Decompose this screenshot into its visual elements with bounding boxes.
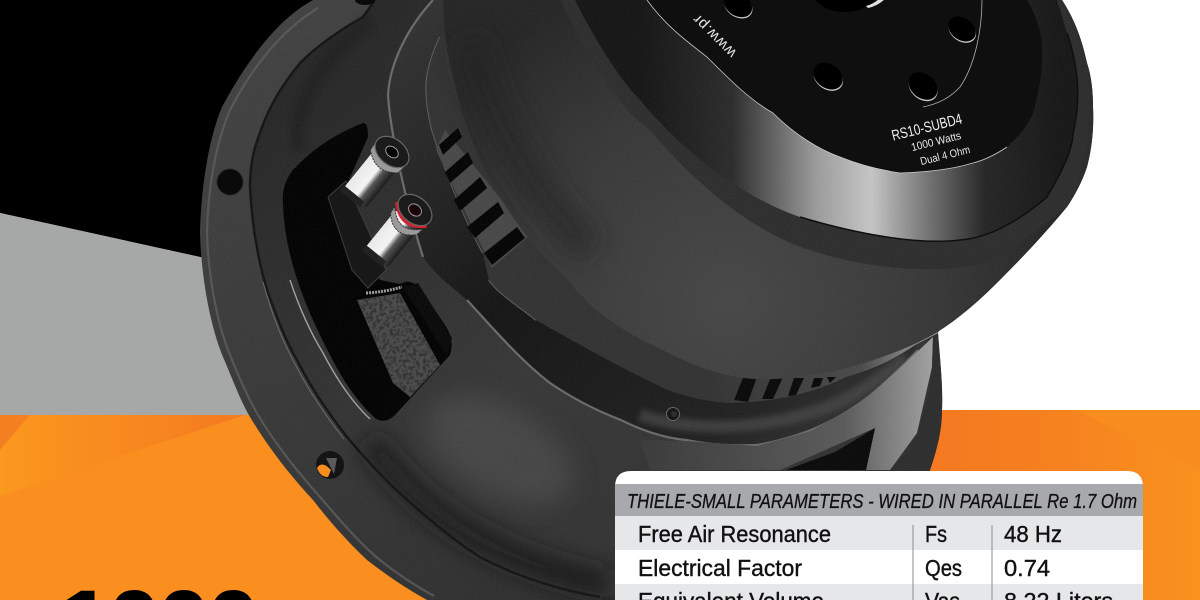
subwoofer flange [200,0,1060,600]
plate url text: www.pr [689,10,741,62]
row 2: electrical factor: Qes [925,555,962,581]
foam gasket [357,293,440,397]
basket upper shading [298,20,370,150]
mounting screw [666,408,680,420]
row 1: free air resonance: Fs [925,521,947,547]
background: black panel [0,0,500,300]
basket interior [250,0,1000,600]
background: orange left panel [0,415,520,600]
basket inner ledge [250,0,600,597]
basket dark shadow band [370,440,610,585]
collar ring [388,0,918,445]
motor bell [426,0,938,403]
basket lit patch [410,374,590,526]
column divider 2 [992,525,993,600]
wire [366,287,402,293]
background: gray panel [0,213,400,415]
flange screw hole [217,169,243,195]
table header band [615,484,1143,516]
terminal slot [403,283,452,356]
background: orange right panel [925,410,1200,600]
plate model label: RS10-SUBD4 [890,111,964,145]
flange edge highlight [207,8,434,596]
bell side vents [436,128,530,268]
chamfer edge shadow [800,33,1078,241]
plate ohm label: Dual 4 Ohm [919,144,971,168]
terminal bracket [328,181,386,288]
plate edge line [647,0,1007,173]
lower collar sparkle [640,358,905,426]
collar inner edge [426,37,536,320]
flange top screw hole [355,0,375,5]
row 1: free air resonance [615,516,1143,550]
basket window right [786,428,875,470]
plate inner circle line [923,0,982,107]
flange bottom mount hole [316,451,344,479]
motor chamfer band [560,0,1090,250]
plate vent hole 3 [902,67,944,107]
motor can [443,0,1093,379]
subwoofer [190,0,1100,600]
row 2: electrical factor: Electrical Factor [638,555,802,581]
motor rim [560,0,1093,269]
terminal window cutout [283,123,452,421]
row 2: electrical factor: 0.74 [1004,555,1050,581]
parameters table [615,471,1143,600]
row 1: free air resonance: Free Air Resonance [638,521,831,547]
motor top plate [647,0,1042,173]
basket outer light line [263,282,344,439]
terminal post black [338,130,415,213]
speaker surface grain [190,0,1100,600]
row 1: free air resonance: 48 Hz [1004,521,1062,547]
plate vent hole 4 [943,11,981,48]
can left shading [470,40,590,250]
window rim highlight [290,280,370,419]
collar outer sparkle edge [388,0,918,445]
plate vent hole 2 [807,57,849,96]
lower basket spoke [640,337,933,470]
table card [615,471,1143,600]
row 3: equivalent volume [615,584,1143,600]
right flange strip [890,333,942,470]
plate vent hole 1 [719,0,757,23]
column divider 1 [912,525,914,600]
plate watts label: 1000 Watts [910,130,963,154]
bell bottom vents [734,373,836,402]
row 2: electrical factor [615,550,1143,584]
center pole hole [813,0,886,12]
terminal post red [359,188,438,272]
